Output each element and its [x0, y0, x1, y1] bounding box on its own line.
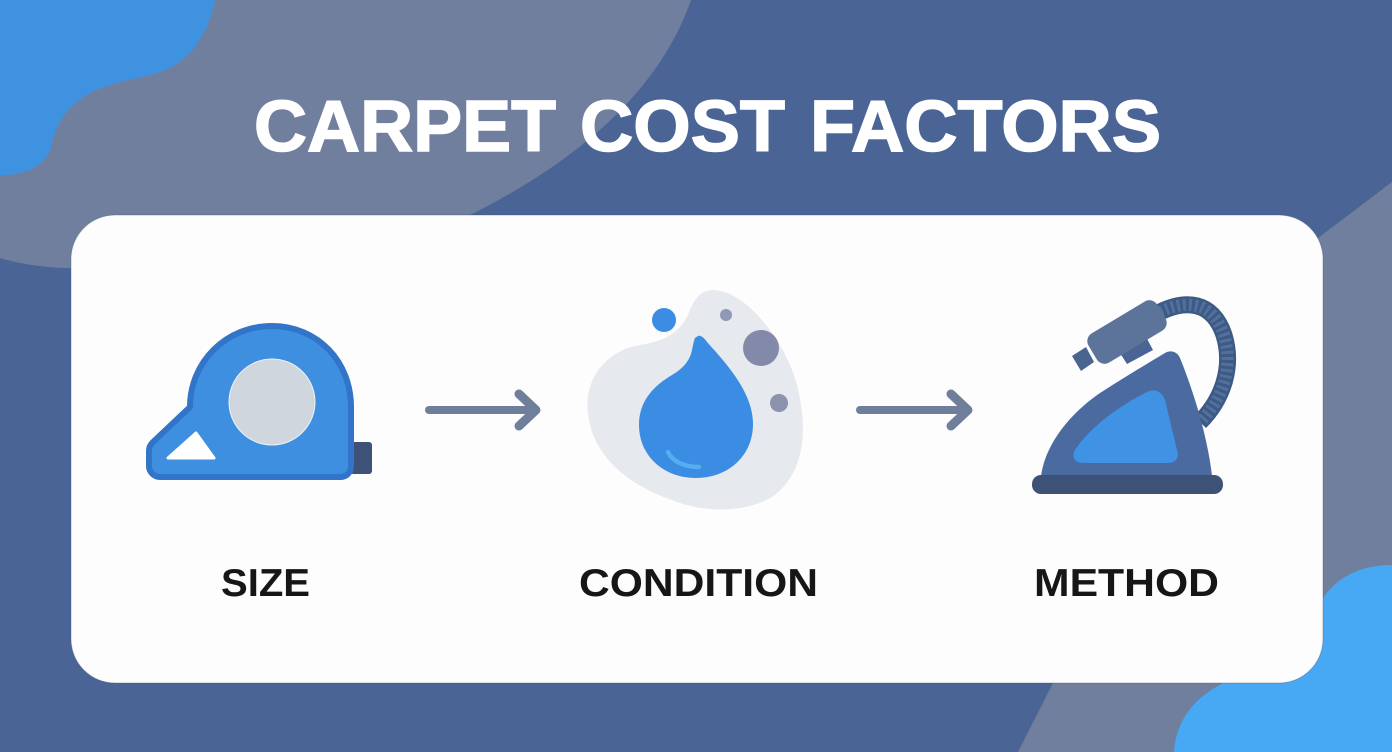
arrow: size to condition: [429, 394, 536, 426]
title: [254, 87, 1161, 167]
title: FACTORS: [810, 87, 1161, 167]
label: size: SIZE: [221, 562, 310, 605]
icon: steam cleaner: [1032, 297, 1228, 494]
arrow: condition to method: [860, 394, 968, 426]
title: CARPET: [254, 87, 556, 167]
title: COST: [580, 87, 785, 167]
label: condition: CONDITION: [579, 562, 818, 605]
icon: tape measure: [149, 326, 372, 477]
panel: cost factors: [71, 215, 1323, 683]
icon: stain and water drop: [587, 290, 803, 509]
label: method: METHOD: [1034, 562, 1219, 605]
